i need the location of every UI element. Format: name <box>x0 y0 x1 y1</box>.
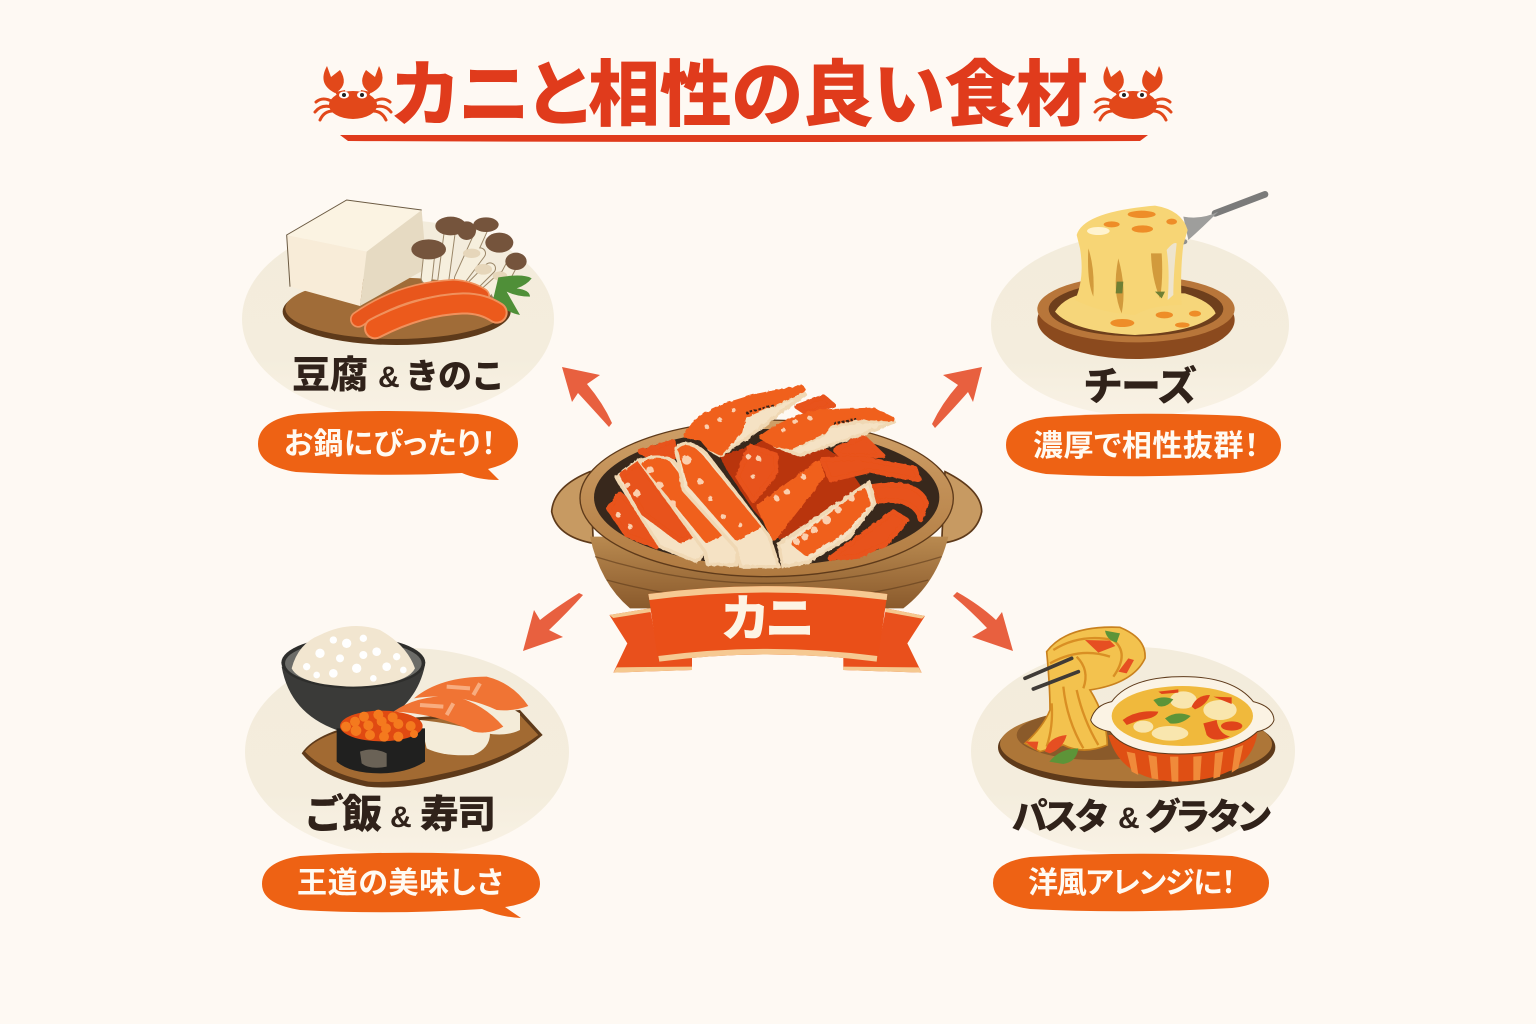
banner right tail <box>843 608 925 673</box>
claw 2 <box>762 410 895 455</box>
chopsticks <box>1025 658 1078 689</box>
claw 1 <box>686 387 805 456</box>
wooden dish <box>1037 276 1235 359</box>
label <box>1012 796 1271 837</box>
panel backdrop <box>971 647 1295 855</box>
panel backdrop <box>242 220 554 418</box>
illustration group <box>1037 194 1265 359</box>
panel: rice and sushi <box>245 626 569 918</box>
title <box>315 56 1171 142</box>
arrow: to cheese <box>932 367 982 428</box>
thin upper right leg <box>822 458 919 480</box>
stretched cheese <box>1075 206 1201 328</box>
panel: tofu and mushrooms <box>242 200 554 480</box>
central illustration: crab pot <box>552 387 982 608</box>
panel: pasta and gratin <box>971 627 1295 911</box>
callout <box>258 411 518 480</box>
panel backdrop <box>991 234 1289 416</box>
banner <box>609 586 925 673</box>
right leg 1 <box>759 463 823 538</box>
callout <box>993 854 1269 911</box>
leg 1 <box>616 461 706 562</box>
right leg 2 <box>779 482 875 567</box>
mushrooms <box>411 217 532 315</box>
crab legs <box>358 287 497 328</box>
arrow: to pasta and gratin <box>953 592 1013 651</box>
banner left tail <box>609 608 692 673</box>
wooden plate <box>283 278 511 345</box>
illustration group <box>281 626 543 787</box>
gratin dish <box>1091 677 1274 782</box>
label: きのこ <box>405 358 505 396</box>
arrow: to rice and sushi <box>523 593 583 651</box>
pot handles <box>552 472 982 543</box>
plate top <box>285 278 507 339</box>
label: 寿司 <box>420 794 496 837</box>
banner text: カニ <box>720 591 815 647</box>
ikura gunkan <box>337 710 425 773</box>
arrow: to tofu <box>562 367 612 427</box>
panel backdrop <box>245 648 569 856</box>
title text: カニと相性の良い食材 <box>392 56 1088 136</box>
label <box>292 355 505 397</box>
label: & <box>1118 802 1140 835</box>
label: グラタン <box>1145 796 1271 837</box>
crab legs <box>608 387 927 567</box>
label: チーズ <box>1083 364 1197 409</box>
rice bowl <box>281 626 425 730</box>
illustration group <box>283 200 532 345</box>
label <box>304 792 496 837</box>
banner centre <box>648 586 887 662</box>
panel: cheese <box>991 194 1289 476</box>
callout: 王道の美味しさ <box>297 867 503 900</box>
callout: 洋風アレンジに！ <box>1028 867 1236 900</box>
fork <box>1155 194 1265 248</box>
cheese pool <box>1055 292 1216 335</box>
label: パスタ <box>1012 796 1108 837</box>
callout <box>262 853 540 918</box>
pot interior <box>594 429 939 566</box>
pasta <box>1025 627 1145 764</box>
wooden plate <box>998 707 1275 788</box>
leg 3 <box>676 444 779 567</box>
dots <box>616 454 855 545</box>
label: ご飯 <box>304 792 382 837</box>
tofu <box>287 200 427 306</box>
back nigiri <box>414 677 528 734</box>
front nigiri <box>393 696 503 755</box>
pot rim <box>580 420 953 577</box>
icon: left crab <box>315 66 391 120</box>
callout <box>1006 414 1281 476</box>
icon: right crab <box>1095 66 1171 120</box>
leg 2 <box>639 457 737 565</box>
label: & <box>378 361 400 394</box>
label: & <box>390 801 412 834</box>
back pieces <box>608 397 907 558</box>
title underline <box>340 135 1148 142</box>
pot body <box>590 537 948 608</box>
label: 豆腐 <box>292 355 368 397</box>
curved claw <box>871 485 927 520</box>
callout: お鍋にぴったり！ <box>284 428 496 461</box>
short leg <box>737 446 776 501</box>
illustration group <box>998 627 1275 788</box>
wooden board <box>302 710 543 787</box>
callout: 濃厚で相性抜群！ <box>1033 430 1259 463</box>
